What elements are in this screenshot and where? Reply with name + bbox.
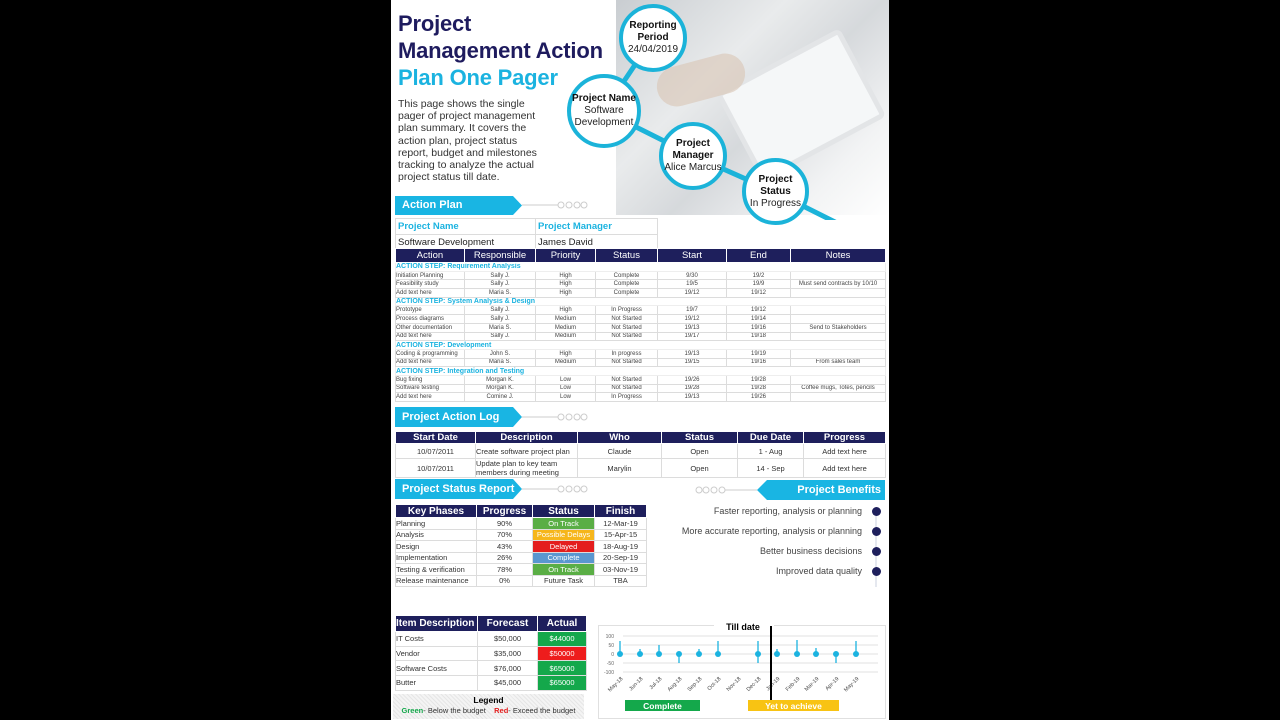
budget table: Item Description <box>396 618 474 629</box>
status report table: 03-Nov-19 <box>603 565 638 574</box>
budget table: $44000 <box>549 634 575 643</box>
action log table: Open <box>690 446 709 456</box>
status report table: Release maintenance <box>396 576 469 585</box>
status report table: 70% <box>497 530 512 539</box>
action log table: Start Date <box>413 432 458 443</box>
title: Project <box>398 11 471 36</box>
action plan table: 19/15 <box>684 359 700 365</box>
status report table: Finish <box>606 506 635 516</box>
status report table: Progress <box>483 506 526 516</box>
benefits list: Faster reporting, analysis or planning <box>714 506 862 516</box>
action plan table: 19/26 <box>751 394 766 400</box>
action plan table: Not Started <box>611 325 642 331</box>
legend: Legend <box>473 695 504 705</box>
action plan table: Process diagrams <box>396 316 444 322</box>
action plan table: 19/12 <box>684 290 700 296</box>
photo background <box>616 0 889 215</box>
benefits list: Improved data quality <box>776 566 862 576</box>
circle: project status: Project <box>759 174 792 184</box>
action log table: 1 - Aug <box>759 446 782 456</box>
action plan table: Coding & programming <box>396 351 458 357</box>
budget table: $45,000 <box>494 678 521 687</box>
status report table: Status <box>548 506 579 516</box>
budget table: $65000 <box>549 678 575 687</box>
action plan table: Sally J. <box>490 273 510 279</box>
action plan table: Software testing <box>396 385 439 391</box>
benefits list: More accurate reporting, analysis or planning <box>682 526 862 536</box>
action plan table: Not Started <box>611 333 642 339</box>
milestone chart: Apr-19 <box>824 676 840 692</box>
action plan table: Comine J. <box>486 394 514 400</box>
budget table: $50000 <box>549 649 575 658</box>
action plan table: Status <box>613 250 640 261</box>
action plan table: High <box>559 273 572 279</box>
action plan table: ACTION STEP: Integration and Testing <box>396 368 524 375</box>
status report table: On Track <box>548 565 579 574</box>
benefits list: Better business decisions <box>760 546 862 556</box>
action plan table: 19/13 <box>684 394 700 400</box>
legend <box>393 694 584 719</box>
action log table: Progress <box>824 432 865 443</box>
status report table: 15-Apr-15 <box>604 530 637 539</box>
budget table: IT Costs <box>396 634 424 643</box>
milestone chart: May-19 <box>843 676 860 693</box>
action plan table: Add text here <box>396 290 432 296</box>
status report table <box>395 505 647 587</box>
milestone chart <box>598 622 886 719</box>
milestone chart: Complete <box>643 701 682 711</box>
action plan table: Notes <box>826 250 850 261</box>
circle: project manager: Alice Marcus <box>664 162 722 173</box>
action plan table: Send to Stakeholders <box>809 325 867 331</box>
action plan table: 19/26 <box>684 377 700 383</box>
budget table <box>395 616 587 691</box>
action log table: 10/07/2011 <box>417 446 454 456</box>
action plan table: 19/7 <box>686 307 698 313</box>
action plan table: Initiation Planning <box>396 273 443 279</box>
action plan table: Morgan K. <box>486 385 514 391</box>
action log table: Add text here <box>822 446 867 456</box>
budget table: Vendor <box>396 649 420 658</box>
status report table: Implementation <box>396 553 447 562</box>
action plan table: Not Started <box>611 359 642 365</box>
action log table: Open <box>690 464 709 472</box>
budget table: $35,000 <box>494 649 521 658</box>
status report table: Delayed <box>550 542 577 551</box>
circle: project name: Software <box>584 105 624 116</box>
action plan table: 19/28 <box>684 385 700 391</box>
circle: reporting period <box>619 4 687 72</box>
milestone chart: 0 <box>611 652 614 658</box>
action plan table: Sally J. <box>490 307 510 313</box>
circle: project name <box>567 74 641 148</box>
action log table: 14 - Sep <box>756 464 785 472</box>
milestone chart: Aug-18 <box>667 676 683 693</box>
action plan table: Morgan K. <box>486 377 514 383</box>
milestone chart: Mar-19 <box>804 676 820 693</box>
action plan table: 9/30 <box>686 273 698 279</box>
banner: project action log: Project Action Log <box>402 411 499 423</box>
status report table: 20-Sep-19 <box>603 553 638 562</box>
project name/manager table <box>395 218 658 248</box>
status report table: 26% <box>497 553 512 562</box>
status report table: Analysis <box>396 530 424 539</box>
title <box>398 11 603 90</box>
milestone chart: 50 <box>608 643 614 649</box>
action plan table: Medium <box>555 359 576 365</box>
action plan table: Sally J. <box>490 281 510 287</box>
circle: reporting period: 24/04/2019 <box>628 44 678 55</box>
circle: project name: Development <box>575 117 633 128</box>
action plan table: 19/13 <box>684 325 700 331</box>
budget table: Forecast <box>487 618 528 629</box>
action plan table: 19/19 <box>751 351 766 357</box>
action plan table: Action <box>417 250 443 261</box>
action plan table: Prototype <box>396 307 422 313</box>
benefits list <box>682 506 881 587</box>
milestone chart: Jul-18 <box>649 676 663 691</box>
milestone chart: 100 <box>606 634 614 640</box>
status report table: Design <box>396 542 419 551</box>
action plan table: ACTION STEP: Requirement Analysis <box>396 263 521 270</box>
action plan table: 19/5 <box>686 281 698 287</box>
action plan table: ACTION STEP: Development <box>396 342 491 349</box>
milestone chart: Till date <box>726 622 760 632</box>
action plan table: 19/28 <box>751 377 766 383</box>
action plan table: In Progress <box>611 394 642 400</box>
action plan table: Medium <box>555 316 576 322</box>
circle: project name: Project Name <box>572 93 636 104</box>
milestone chart: Jan-19 <box>765 676 781 692</box>
banner: project status report <box>395 479 522 499</box>
status report table: On Track <box>548 519 579 528</box>
action plan table: Other documentation <box>396 325 452 331</box>
status report table: TBA <box>613 576 628 585</box>
action plan table: Responsible <box>474 250 526 261</box>
action plan table: High <box>559 281 572 287</box>
action plan table: 19/2 <box>753 273 764 279</box>
action plan table: 19/12 <box>751 290 766 296</box>
budget table: $50,000 <box>494 634 521 643</box>
circle: project manager <box>659 122 727 190</box>
action plan table: High <box>559 307 572 313</box>
milestone chart: Jun-18 <box>628 676 644 692</box>
action plan table: John S. <box>490 351 510 357</box>
action plan table: High <box>559 351 572 357</box>
milestone chart: Oct-18 <box>706 676 722 692</box>
action plan table: High <box>559 290 572 296</box>
action plan table: 19/16 <box>751 359 766 365</box>
connector lines <box>622 64 836 220</box>
action plan table: Must send contracts by 10/10 <box>799 281 877 287</box>
status report table: 78% <box>497 565 512 574</box>
action log table: Due Date <box>750 432 791 443</box>
banner: project benefits: Project Benefits <box>797 484 881 496</box>
action plan table: Sally J. <box>490 316 510 322</box>
status report table: Possible Delays <box>537 530 590 539</box>
status report table: 0% <box>499 576 510 585</box>
budget table: $76,000 <box>494 664 521 673</box>
budget table: $65000 <box>549 664 575 673</box>
project name/manager table: Project Name <box>398 221 459 232</box>
banner: action plan <box>395 196 522 215</box>
action plan table <box>395 248 886 402</box>
title: Plan One Pager <box>398 65 558 90</box>
status report table: Key Phases <box>408 506 464 516</box>
action plan table: Priority <box>551 250 580 261</box>
action plan table: In progress <box>611 351 642 357</box>
status report table: 90% <box>497 519 512 528</box>
milestone chart: Feb-19 <box>785 676 801 693</box>
description: This page shows the single pager of project management plan summary. It covers the action plan, project status report, budget and milestones tracking to analyze the actual project status till date. <box>398 98 537 183</box>
milestone chart: Sep-18 <box>687 676 703 693</box>
action plan table: 19/12 <box>751 307 766 313</box>
action plan table: Not Started <box>611 316 642 322</box>
action plan table: Complete <box>614 281 639 287</box>
action plan table: 19/9 <box>753 281 764 287</box>
status report table: 43% <box>497 542 512 551</box>
status report table: 12-Mar-19 <box>603 519 638 528</box>
action plan table: Medium <box>555 325 576 331</box>
project name/manager table: James David <box>538 236 593 248</box>
milestone chart: Dec-18 <box>746 676 762 693</box>
circle: reporting period: Reporting <box>629 20 677 31</box>
status report table: Future Task <box>544 576 583 585</box>
circle: project manager: Project <box>676 138 710 149</box>
action log table: Status <box>685 432 714 443</box>
action plan table: From sales team <box>816 359 860 365</box>
action plan table: Low <box>560 385 571 391</box>
action plan table: Maria S. <box>489 325 511 331</box>
action plan table: 19/13 <box>684 351 700 357</box>
budget table: Actual <box>547 618 577 629</box>
action plan table: 19/17 <box>684 333 700 339</box>
circle: project status: Status <box>760 186 791 196</box>
action plan table: Bug fixing <box>396 377 422 383</box>
circle: project manager: Manager <box>672 150 714 161</box>
action plan table: Add text here <box>396 359 432 365</box>
action plan table: Low <box>560 394 571 400</box>
action plan table: Add text here <box>396 333 432 339</box>
action plan table: ACTION STEP: System Analysis & Design <box>396 298 535 305</box>
milestone chart: May-18 <box>607 676 624 693</box>
action log table: Claude <box>608 446 631 456</box>
circle: project status <box>742 158 809 225</box>
action plan table: 19/16 <box>751 325 766 331</box>
action plan table: Maria S. <box>489 359 511 365</box>
banner: project status report: Project Status Report <box>402 483 514 495</box>
project name/manager table: Project Manager <box>538 221 612 232</box>
title: Management Action <box>398 38 603 63</box>
status report table: Planning <box>396 519 425 528</box>
action log table: Description <box>500 432 553 443</box>
action plan table: Start <box>682 250 702 261</box>
action log table: Who <box>609 432 630 443</box>
action plan table: Coffee mugs, Totes, pencils <box>801 385 875 391</box>
action plan table: End <box>750 250 767 261</box>
action plan table: Medium <box>555 333 576 339</box>
action plan table: Feasibility study <box>396 281 439 287</box>
project name/manager table: Software Development <box>398 236 494 248</box>
milestone chart: Yet to achieve <box>765 701 822 711</box>
milestone chart: -100 <box>604 670 614 676</box>
banner: action plan: Action Plan <box>402 199 463 211</box>
milestone chart: Nov-18 <box>726 676 742 693</box>
action log table: Marylin <box>607 464 632 472</box>
action plan table: 19/12 <box>684 316 700 322</box>
action plan table: Maria S. <box>489 290 511 296</box>
action log table: Create software project plan <box>476 446 570 456</box>
action plan table: Complete <box>614 290 639 296</box>
status report table: 18-Aug-19 <box>603 542 638 551</box>
banner: project action log <box>395 407 522 427</box>
circle: reporting period: Period <box>637 32 669 43</box>
action log table: Add text here <box>822 464 867 472</box>
budget table: Software Costs <box>396 664 447 673</box>
legend: Green- Below the budget Red- Exceed the budget <box>402 706 575 715</box>
action plan table: Complete <box>614 273 639 279</box>
milestone chart: -50 <box>607 661 614 667</box>
action plan table: In Progress <box>611 307 642 313</box>
action plan table: Sally J. <box>490 333 510 339</box>
action plan table: 19/18 <box>751 333 766 339</box>
status report table: Testing & verification <box>396 565 465 574</box>
budget table: Butter <box>396 678 416 687</box>
action log table: Update plan to key team members during meeting <box>476 459 559 477</box>
action plan table: 19/28 <box>751 385 766 391</box>
status report table: Complete <box>547 553 580 562</box>
action plan table: Not Started <box>611 377 642 383</box>
action plan table: 19/14 <box>751 316 766 322</box>
action plan table: Low <box>560 377 571 383</box>
action plan table: Not Started <box>611 385 642 391</box>
banner: project benefits <box>757 480 885 500</box>
action log table: 10/07/2011 <box>417 464 454 472</box>
circle: project status: In Progress <box>750 198 801 208</box>
action log table <box>395 432 886 478</box>
action plan table: Add text here <box>396 394 432 400</box>
